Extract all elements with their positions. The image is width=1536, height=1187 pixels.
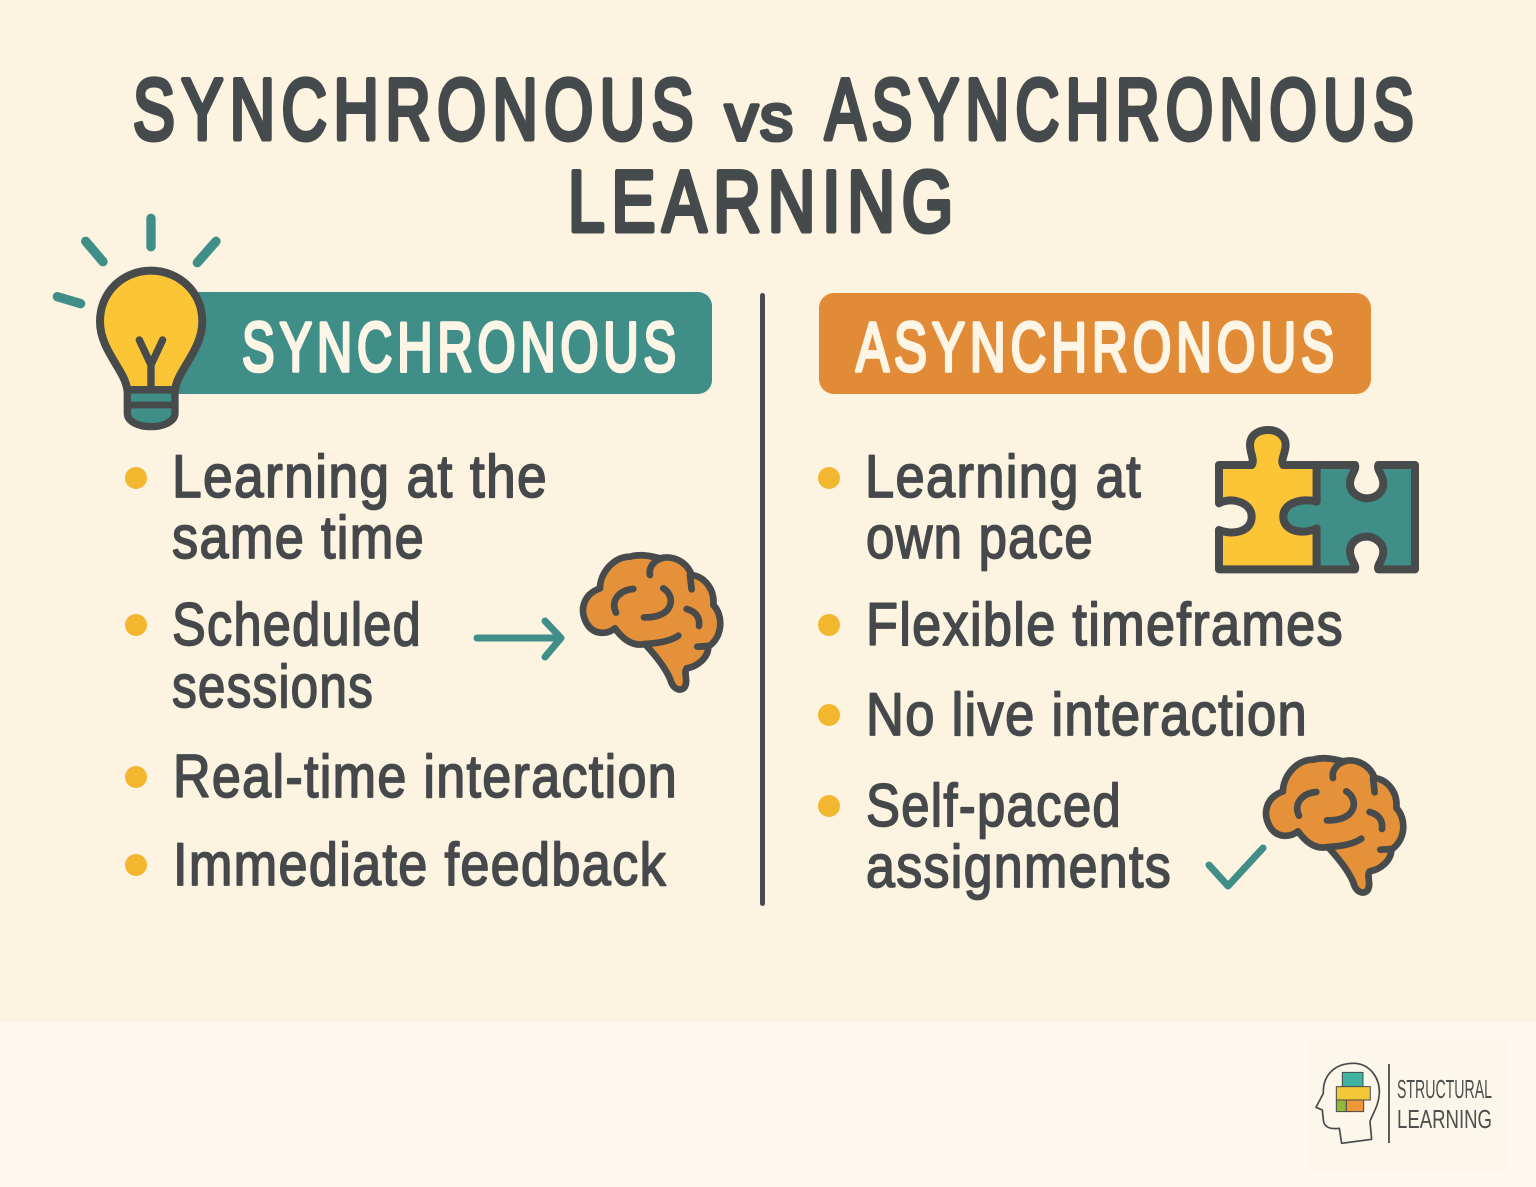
icon: puzzle xyxy=(1219,430,1415,569)
title xyxy=(133,62,1420,250)
bullet list: asynchronous xyxy=(818,443,1344,900)
bullet list: synchronous: Learning at the xyxy=(172,443,548,510)
icon: brain xyxy=(1266,758,1403,893)
icon: check mark xyxy=(1209,848,1263,886)
bullet list: asynchronous: No live interaction xyxy=(866,681,1308,748)
panel: synchronous xyxy=(57,218,720,898)
icon: light bulb xyxy=(57,218,216,427)
title: vs xyxy=(725,80,795,154)
center divider xyxy=(760,293,765,906)
panel: asynchronous xyxy=(818,293,1415,900)
arrow xyxy=(477,621,561,657)
heading banner: asynchronous xyxy=(819,293,1371,394)
logo head with blocks xyxy=(1316,1063,1379,1143)
bullet list: asynchronous: Self-paced xyxy=(866,772,1122,839)
heading banner: synchronous: SYNCHRONOUS xyxy=(242,308,681,386)
bullet list: synchronous: Immediate feedback xyxy=(173,831,667,898)
bullet list: asynchronous: Learning at xyxy=(865,443,1142,510)
logo text xyxy=(1397,1074,1492,1134)
bullet list: synchronous: Scheduled xyxy=(172,591,422,658)
title: SYNCHRONOUS xyxy=(133,62,700,158)
bullet list: asynchronous: own pace xyxy=(866,504,1094,571)
bullet list: asynchronous: Flexible timeframes xyxy=(866,591,1344,658)
bullet list: synchronous: sessions xyxy=(172,653,374,720)
icon: brain xyxy=(583,555,720,690)
logo: structural learning xyxy=(1307,1040,1507,1171)
heading banner: asynchronous: ASYNCHRONOUS xyxy=(856,308,1339,386)
title: LEARNING xyxy=(568,154,960,250)
heading banner: synchronous xyxy=(170,292,712,394)
logo text: LEARNING xyxy=(1397,1104,1492,1134)
bullet list: synchronous xyxy=(125,443,678,898)
logo divider xyxy=(1388,1064,1390,1143)
bullet list: synchronous: same time xyxy=(172,504,425,571)
bullet list: synchronous: Real-time interaction xyxy=(173,743,678,810)
bullet list: asynchronous: assignments xyxy=(866,833,1172,900)
footer band xyxy=(0,1023,1536,1187)
